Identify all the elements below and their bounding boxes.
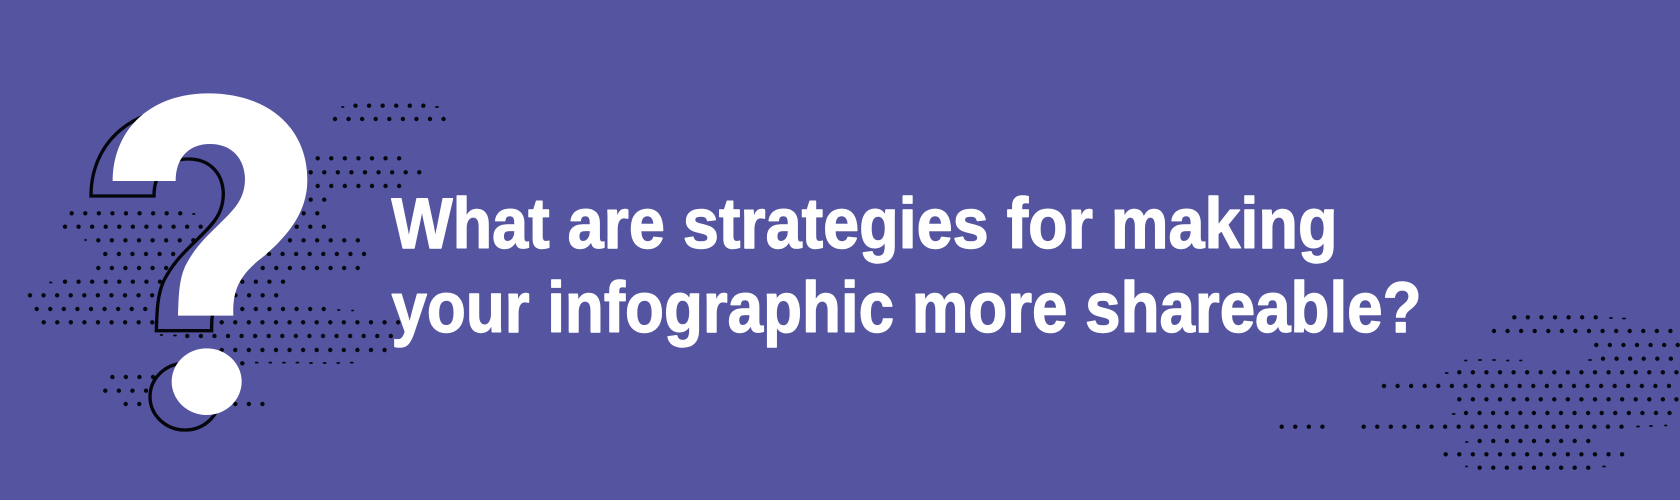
title — [392, 185, 1422, 348]
question mark outline shadow — [91, 108, 286, 430]
question mark white solid — [113, 93, 307, 415]
halftone dots: left cluster — [30, 106, 445, 404]
title line 2: your infographic more shareable? — [392, 269, 1422, 348]
halftone dots: right cluster — [1282, 317, 1680, 468]
title line 1: What are strategies for making — [392, 185, 1338, 264]
icon: question mark — [91, 93, 307, 430]
halftone dots: clipped fragments at cluster edges — [50, 107, 1666, 466]
